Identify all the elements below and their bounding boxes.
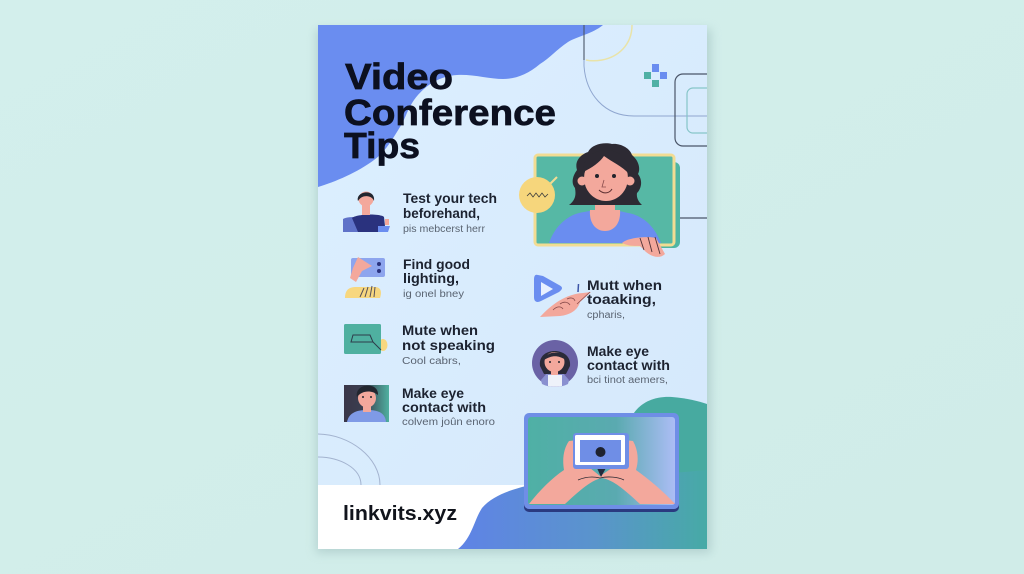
tip: find good lighting: Find good bbox=[403, 256, 470, 272]
teal blob behind laptop bbox=[634, 396, 707, 472]
tip: find good lighting: lighting, bbox=[403, 270, 459, 286]
video frame bbox=[535, 155, 674, 245]
tip: mute when not speaking: not speaking bbox=[402, 337, 495, 353]
tip: test your tech: pis mebcerst herr bbox=[403, 224, 486, 235]
tip: mutt when toaaking: Mutt when bbox=[587, 277, 662, 293]
tip: find good lighting: ig onel bney bbox=[403, 289, 464, 300]
decorative rounded lines bbox=[317, 25, 727, 485]
icon: play button and hand bbox=[534, 275, 591, 317]
tip: make eye contact 2: bci tinot aemers, bbox=[587, 375, 668, 386]
tip: make eye contact: colvem joûn enoro bbox=[402, 417, 495, 428]
tip: test your tech: Test your tech bbox=[403, 190, 497, 206]
icon: teal screen bbox=[344, 324, 388, 354]
bottom white footer band bbox=[318, 485, 538, 549]
icon: plus of squares bbox=[644, 64, 667, 87]
tip: mute when not speaking: Cool cabrs, bbox=[402, 356, 461, 367]
tip: make eye contact: contact with bbox=[402, 399, 486, 415]
icon: person at desk bbox=[343, 192, 390, 232]
tip: mute when not speaking: Mute when bbox=[402, 322, 478, 338]
tip: make eye contact 2: Make eye bbox=[587, 343, 649, 359]
icon: round avatar bbox=[532, 340, 578, 387]
title bbox=[344, 56, 556, 166]
footer url: linkvits.xyz bbox=[343, 503, 457, 525]
tip: mute when not speaking bbox=[344, 322, 495, 367]
top-left blue blob bbox=[318, 25, 603, 187]
tip: make eye contact 2: contact with bbox=[587, 357, 670, 373]
illustration: laptop with hands holding phone bbox=[524, 413, 679, 512]
icon: phone camera bbox=[573, 433, 629, 469]
title: Tips bbox=[344, 125, 420, 166]
bottom-right blue-teal blob bbox=[458, 470, 707, 549]
title: Video bbox=[345, 56, 453, 97]
tip: make eye contact bbox=[344, 385, 495, 428]
icon: person portrait bbox=[344, 385, 389, 422]
tip: mutt when toaaking bbox=[534, 275, 662, 321]
icon: yellow speech bubble bbox=[519, 177, 557, 213]
hand over frame bbox=[622, 237, 665, 257]
tip: make eye contact: Make eye bbox=[402, 385, 464, 401]
hands bbox=[529, 440, 675, 504]
tip: mutt when toaaking: cpharis, bbox=[587, 310, 625, 321]
tip: make eye contact 2 bbox=[532, 340, 670, 387]
tip: mutt when toaaking: toaaking, bbox=[587, 291, 656, 307]
panel: poster bbox=[317, 25, 727, 549]
hair bbox=[569, 143, 642, 205]
illustration: woman on video call bbox=[519, 143, 680, 257]
tip: test your tech bbox=[343, 190, 497, 235]
tip: test your tech: beforehand, bbox=[403, 205, 480, 221]
icon: hand with phone bbox=[345, 257, 385, 298]
title: Conference bbox=[344, 92, 556, 133]
tip: find good lighting bbox=[345, 256, 470, 300]
